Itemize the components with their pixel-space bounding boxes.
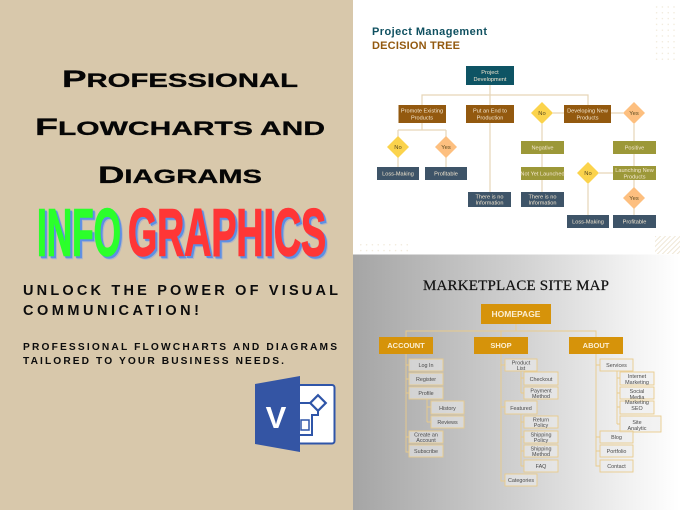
column: about pages: Services [606, 363, 627, 369]
decision: yes left branch [435, 136, 457, 158]
node: account [379, 337, 433, 354]
column: about pages: Media [630, 395, 644, 401]
text block: tailored flowcharts description: PROFESSIONAL FLOWCHARTS AND DIAGRAMS [23, 342, 337, 353]
state: negative [521, 141, 564, 154]
tagline: unlock the power of visual communication: COMMUNICATION! [23, 303, 199, 319]
panel: marketplace site map [353, 254, 680, 510]
column: about pages: Analytic [628, 426, 647, 432]
node: developing new products [564, 105, 611, 123]
text block: tailored flowcharts description [23, 342, 337, 367]
decision: yes right branch [623, 187, 645, 209]
outcome: there is no information [468, 192, 511, 207]
column: about pages: Portfolio [607, 449, 626, 455]
heading: project management decision tree: Project Management [372, 26, 487, 38]
node: homepage [481, 304, 551, 324]
heading: marketplace site map: MARKETPLACE SITE MAP [423, 278, 609, 294]
heading: professional flowcharts and diagrams [35, 66, 325, 189]
wordmark: infographics [37, 196, 326, 270]
node: put an end to production: Put an End to [473, 108, 507, 114]
column: about pages: Marketing [625, 400, 649, 406]
decision: no right branch [577, 162, 599, 184]
column: shop pages: Policy [534, 423, 548, 429]
icon: visio logo: V [266, 400, 287, 435]
state: launching new products: Launching New [615, 168, 655, 174]
decision: no: No [538, 111, 546, 117]
tagline: unlock the power of visual communication [23, 283, 338, 319]
state: positive [613, 141, 656, 154]
outcome: there is no information second [521, 192, 564, 207]
column: shop pages: FAQ [536, 464, 546, 470]
column: account pages: Profile [418, 391, 434, 397]
decision: yes right branch: Yes [629, 196, 639, 202]
state: not yet launched: Not Yet Launched [520, 172, 565, 178]
column: shop pages: Method [532, 394, 550, 400]
column: account pages: Account [416, 438, 436, 444]
column: shop pages: Method [532, 452, 550, 458]
node: promote existing products: Promote Existing [401, 108, 443, 114]
outcome: loss-making [377, 167, 419, 180]
column: about pages: Site [632, 420, 642, 426]
outcome: profitable right: Profitable [623, 220, 646, 226]
state: not yet launched [520, 167, 565, 180]
outcome: profitable: Profitable [434, 172, 458, 178]
decision: no left branch: No [394, 145, 402, 151]
decision: no left branch [387, 136, 409, 158]
node: put an end to production [466, 105, 514, 123]
connectors: site map lines [406, 324, 620, 481]
heading: professional flowcharts and diagrams: P ROFESSIONAL [62, 66, 298, 93]
column: about pages: Blog [611, 435, 622, 441]
node: about: ABOUT [583, 341, 610, 350]
wordmark: infographics: INFO [37, 196, 121, 270]
column: account pages: Subscribe [414, 449, 438, 455]
decision: yes left branch: Yes [441, 145, 451, 151]
column: account pages: History [439, 406, 456, 412]
node: project development [466, 66, 514, 85]
heading: professional flowcharts and diagrams: F LOWCHARTS AND [35, 114, 325, 141]
column: shop pages: Shipping [531, 446, 551, 452]
node: developing new products: Products [576, 116, 599, 122]
column: shop pages: List [517, 366, 526, 372]
node: shop [474, 337, 528, 354]
outcome: there is no information: Information [476, 200, 503, 206]
node: promote existing products [398, 105, 446, 123]
node: account: ACCOUNT [387, 341, 425, 350]
state: launching new products [613, 166, 656, 180]
column: shop pages: Product [512, 360, 531, 366]
node: project development: Project [481, 70, 499, 76]
connectors: decision tree lines [398, 85, 634, 215]
node: project development: Development [474, 77, 507, 83]
panel: left beige promo panel [0, 0, 353, 510]
column: shop pages: Featured [510, 406, 532, 412]
column: shop pages: Policy [534, 438, 548, 444]
column: account pages: Log In [418, 363, 434, 369]
tagline: unlock the power of visual communication: UNLOCK THE POWER OF VISUAL [23, 283, 338, 299]
decision: no right branch: No [584, 171, 592, 177]
node: shop: SHOP [490, 341, 512, 350]
outcome: there is no information second: Information [529, 200, 556, 206]
heading: project management decision tree [372, 26, 487, 52]
outcome: profitable right [613, 215, 656, 228]
column: about pages: Internet [628, 374, 647, 380]
column: account pages: Create an [414, 432, 438, 438]
decision: yes: Yes [629, 111, 639, 117]
column: about pages: Contact [607, 464, 626, 470]
column: shop pages: Shipping [531, 432, 551, 438]
column: about pages [600, 359, 661, 472]
outcome: loss-making right [567, 215, 609, 228]
decision: yes [623, 102, 645, 124]
outcome: there is no information second: There is no [529, 194, 556, 200]
heading: project management decision tree: DECISION TREE [372, 40, 460, 52]
column: shop pages: Categories [508, 478, 534, 484]
column: shop pages: Payment [530, 388, 552, 394]
panel: project management decision tree [353, 0, 680, 255]
outcome: loss-making: Loss-Making [382, 172, 414, 178]
column: account pages: Register [416, 377, 436, 383]
column: shop pages: Checkout [530, 377, 553, 383]
wordmark: infographics: GRAPHICS [128, 196, 326, 270]
text block: tailored flowcharts description: TAILORED TO YOUR BUSINESS NEEDS. [23, 356, 284, 367]
icon: visio logo [255, 376, 334, 452]
outcome: there is no information: There is no [476, 194, 503, 200]
node: promote existing products: Products [411, 116, 433, 122]
column: account pages: Reviews [437, 420, 458, 426]
node: put an end to production: Production [477, 116, 503, 122]
state: launching new products: Products [623, 174, 646, 180]
column: shop pages: Return [533, 418, 549, 424]
decision: no [531, 102, 553, 124]
column: shop pages [505, 359, 558, 486]
outcome: profitable [425, 167, 467, 180]
column: about pages: Social [630, 389, 644, 395]
heading: professional flowcharts and diagrams: D IAGRAMS [98, 162, 262, 189]
column: account pages [409, 359, 464, 457]
node: about [569, 337, 623, 354]
column: about pages: SEO [631, 406, 643, 412]
outcome: loss-making right: Loss-Making [572, 220, 604, 226]
state: positive: Positive [625, 146, 644, 152]
node: homepage: HOMEPAGE [492, 309, 541, 319]
node: developing new products: Developing New [567, 108, 609, 114]
column: about pages: Marketing [625, 380, 649, 386]
state: negative: Negative [531, 146, 554, 152]
